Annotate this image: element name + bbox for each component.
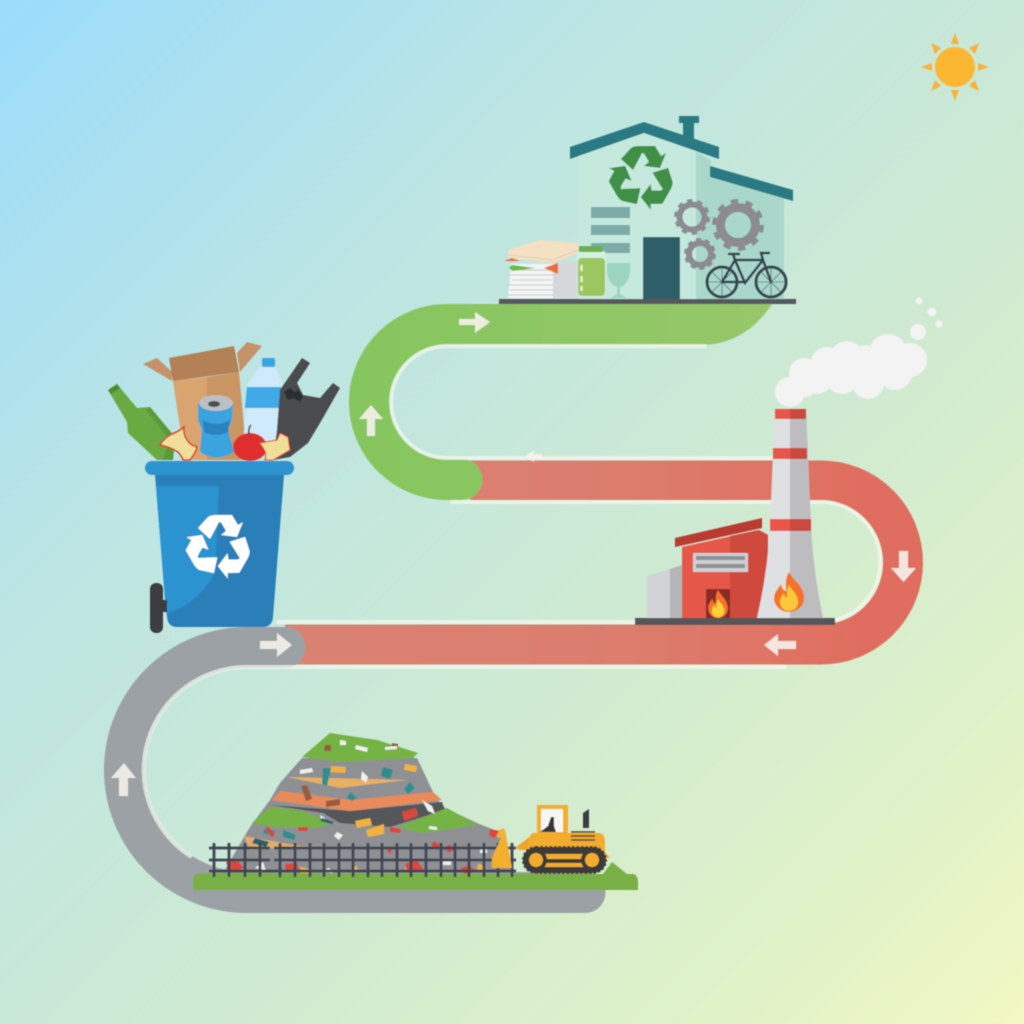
gear: large <box>716 203 760 247</box>
arrow: green right <box>459 312 490 333</box>
pathway: green recycling route <box>349 304 772 500</box>
cardboard box <box>143 342 262 460</box>
exhaust stack <box>583 809 589 828</box>
debris <box>226 740 506 874</box>
bin lighter panel <box>156 486 219 613</box>
chimney <box>679 116 699 143</box>
bulldozer <box>492 805 610 873</box>
waste mound <box>223 758 515 873</box>
recycling bin full of waste <box>108 342 340 633</box>
icon: green recycle symbol <box>603 146 679 213</box>
green glass bottle <box>108 384 175 460</box>
arrow: red left <box>764 634 796 656</box>
gear: small <box>687 241 713 267</box>
arrow: green up <box>359 405 383 436</box>
apple core right <box>259 433 290 460</box>
black plastic bag <box>273 358 340 460</box>
smoke cloud <box>775 298 942 407</box>
icon: sun <box>921 33 989 101</box>
water bottle <box>243 358 282 445</box>
landfill scene <box>193 733 638 890</box>
pathway highlight lines <box>144 346 880 856</box>
glass cup <box>607 263 630 298</box>
stack flame <box>774 572 804 612</box>
red apple <box>233 425 267 461</box>
main roof <box>570 122 719 159</box>
arrow: red down <box>891 551 916 582</box>
flow arrows <box>111 312 916 796</box>
fence <box>209 843 516 877</box>
bin lid <box>145 461 294 475</box>
gears <box>677 202 760 267</box>
pathway: red incineration route <box>285 480 903 644</box>
paper stack <box>504 240 578 298</box>
window bars <box>591 207 630 253</box>
furnace flame <box>708 590 728 618</box>
gear: medium <box>677 202 707 232</box>
glass jar <box>577 246 606 297</box>
side roof <box>710 166 793 201</box>
front wall <box>579 133 696 299</box>
apple core left <box>160 427 197 460</box>
cab <box>537 805 568 833</box>
blade <box>492 830 512 868</box>
factory building <box>675 518 768 618</box>
bin wheel <box>150 583 167 633</box>
house: recycling centre <box>499 116 796 304</box>
incineration plant <box>635 298 942 625</box>
grey annex <box>647 565 682 618</box>
door <box>643 237 680 299</box>
side wall <box>696 152 784 299</box>
engine body <box>528 833 610 858</box>
ground <box>193 862 638 890</box>
arrow: grey right <box>260 633 292 657</box>
illustration layer <box>108 33 989 892</box>
smokestack <box>757 409 823 618</box>
tracks <box>523 847 606 873</box>
platform <box>499 299 796 304</box>
bin body <box>155 475 284 627</box>
platform <box>635 618 835 625</box>
pathway: grey landfill route <box>124 648 585 892</box>
crushed can <box>198 395 234 458</box>
mound layers <box>244 777 445 850</box>
bicycle <box>707 253 786 297</box>
grass patches <box>252 733 477 833</box>
icon: white recycle symbol <box>180 515 256 582</box>
arrow: grey up <box>111 763 136 796</box>
arrow: red left small <box>525 450 542 462</box>
